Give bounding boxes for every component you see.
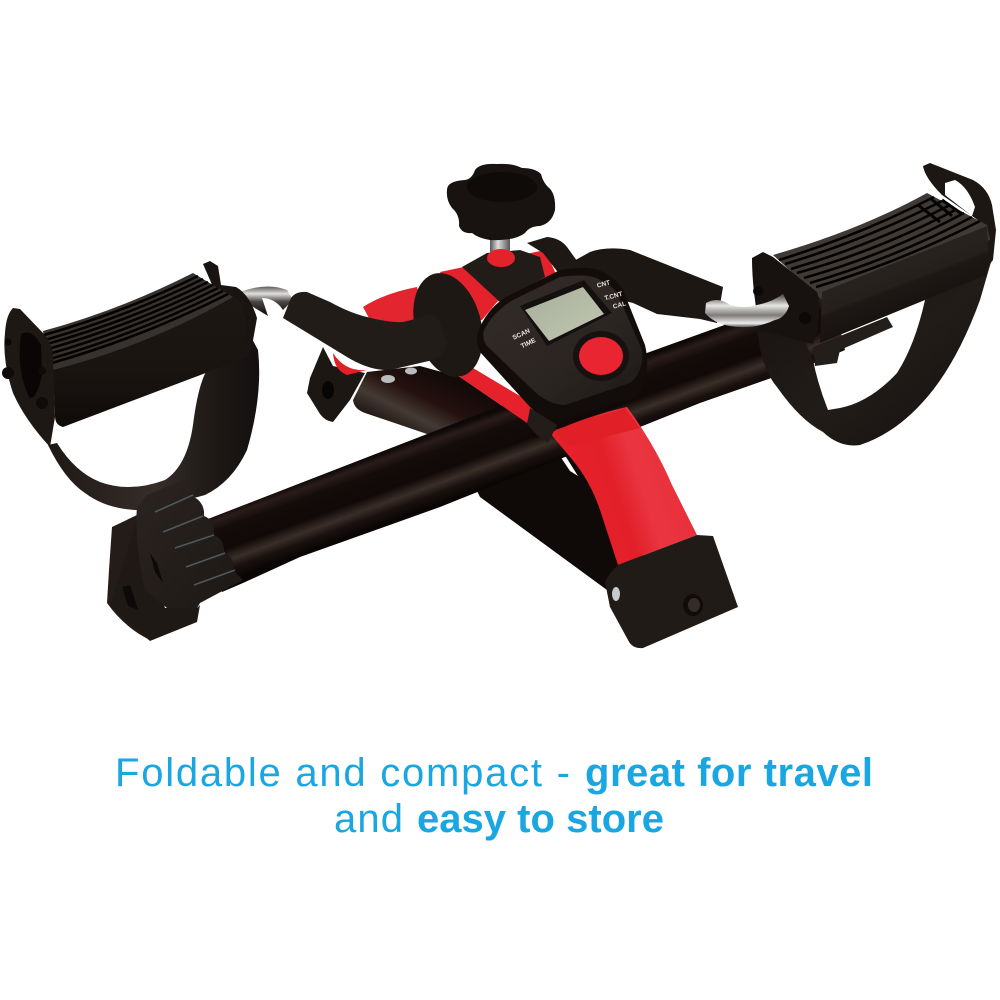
red button	[573, 331, 629, 381]
main horizontal tube	[190, 286, 845, 592]
console labels	[512, 279, 627, 350]
right foot strap	[757, 255, 993, 445]
red arch support	[550, 407, 697, 565]
screen bezel	[520, 280, 612, 346]
white gap beside arch	[558, 453, 578, 476]
fin under right pedal	[813, 317, 893, 366]
lower leg tube under the arch	[470, 435, 645, 590]
rear tube and rear foot bracket	[307, 347, 530, 440]
left foot strap	[48, 335, 259, 510]
tension knob	[447, 164, 555, 267]
console labels: CAL	[612, 300, 627, 311]
red strip below console	[460, 368, 535, 423]
ribbed top	[43, 273, 245, 385]
caption line 2: easy to store	[417, 797, 664, 841]
left handle arm	[283, 292, 447, 370]
digital display console	[477, 268, 647, 420]
collar ring	[402, 265, 494, 385]
seat bracket and band	[462, 237, 585, 302]
far pedal plate	[923, 163, 996, 270]
right pedal	[705, 163, 996, 344]
left pedal	[2, 261, 257, 447]
console neck clip	[527, 408, 557, 443]
right chrome crank	[705, 294, 789, 327]
caption	[115, 751, 873, 841]
caption line 2: and	[334, 797, 403, 841]
console labels: CNT	[596, 279, 611, 290]
rear pedal plate	[203, 261, 257, 357]
caption line 1: Foldable and compact -	[115, 751, 570, 795]
LCD screen	[525, 287, 604, 341]
caption line 1	[115, 751, 873, 795]
console labels: SCAN	[512, 327, 531, 342]
front face	[820, 226, 989, 343]
near plate	[752, 252, 819, 344]
left chrome crank	[240, 286, 293, 316]
caption line 1: great for travel	[585, 751, 873, 795]
front face	[53, 297, 248, 427]
rear foot cap	[605, 535, 738, 648]
front rubber foot	[107, 478, 243, 641]
console labels: TIME	[520, 337, 537, 350]
console labels: T.CNT	[604, 291, 623, 302]
ribbed top	[773, 193, 990, 300]
end plate	[4, 308, 55, 447]
product: folding pedal exerciser	[2, 163, 996, 648]
red shoulder	[440, 250, 556, 320]
right handle arm	[572, 248, 723, 323]
red upper frame, rear section	[363, 287, 430, 330]
